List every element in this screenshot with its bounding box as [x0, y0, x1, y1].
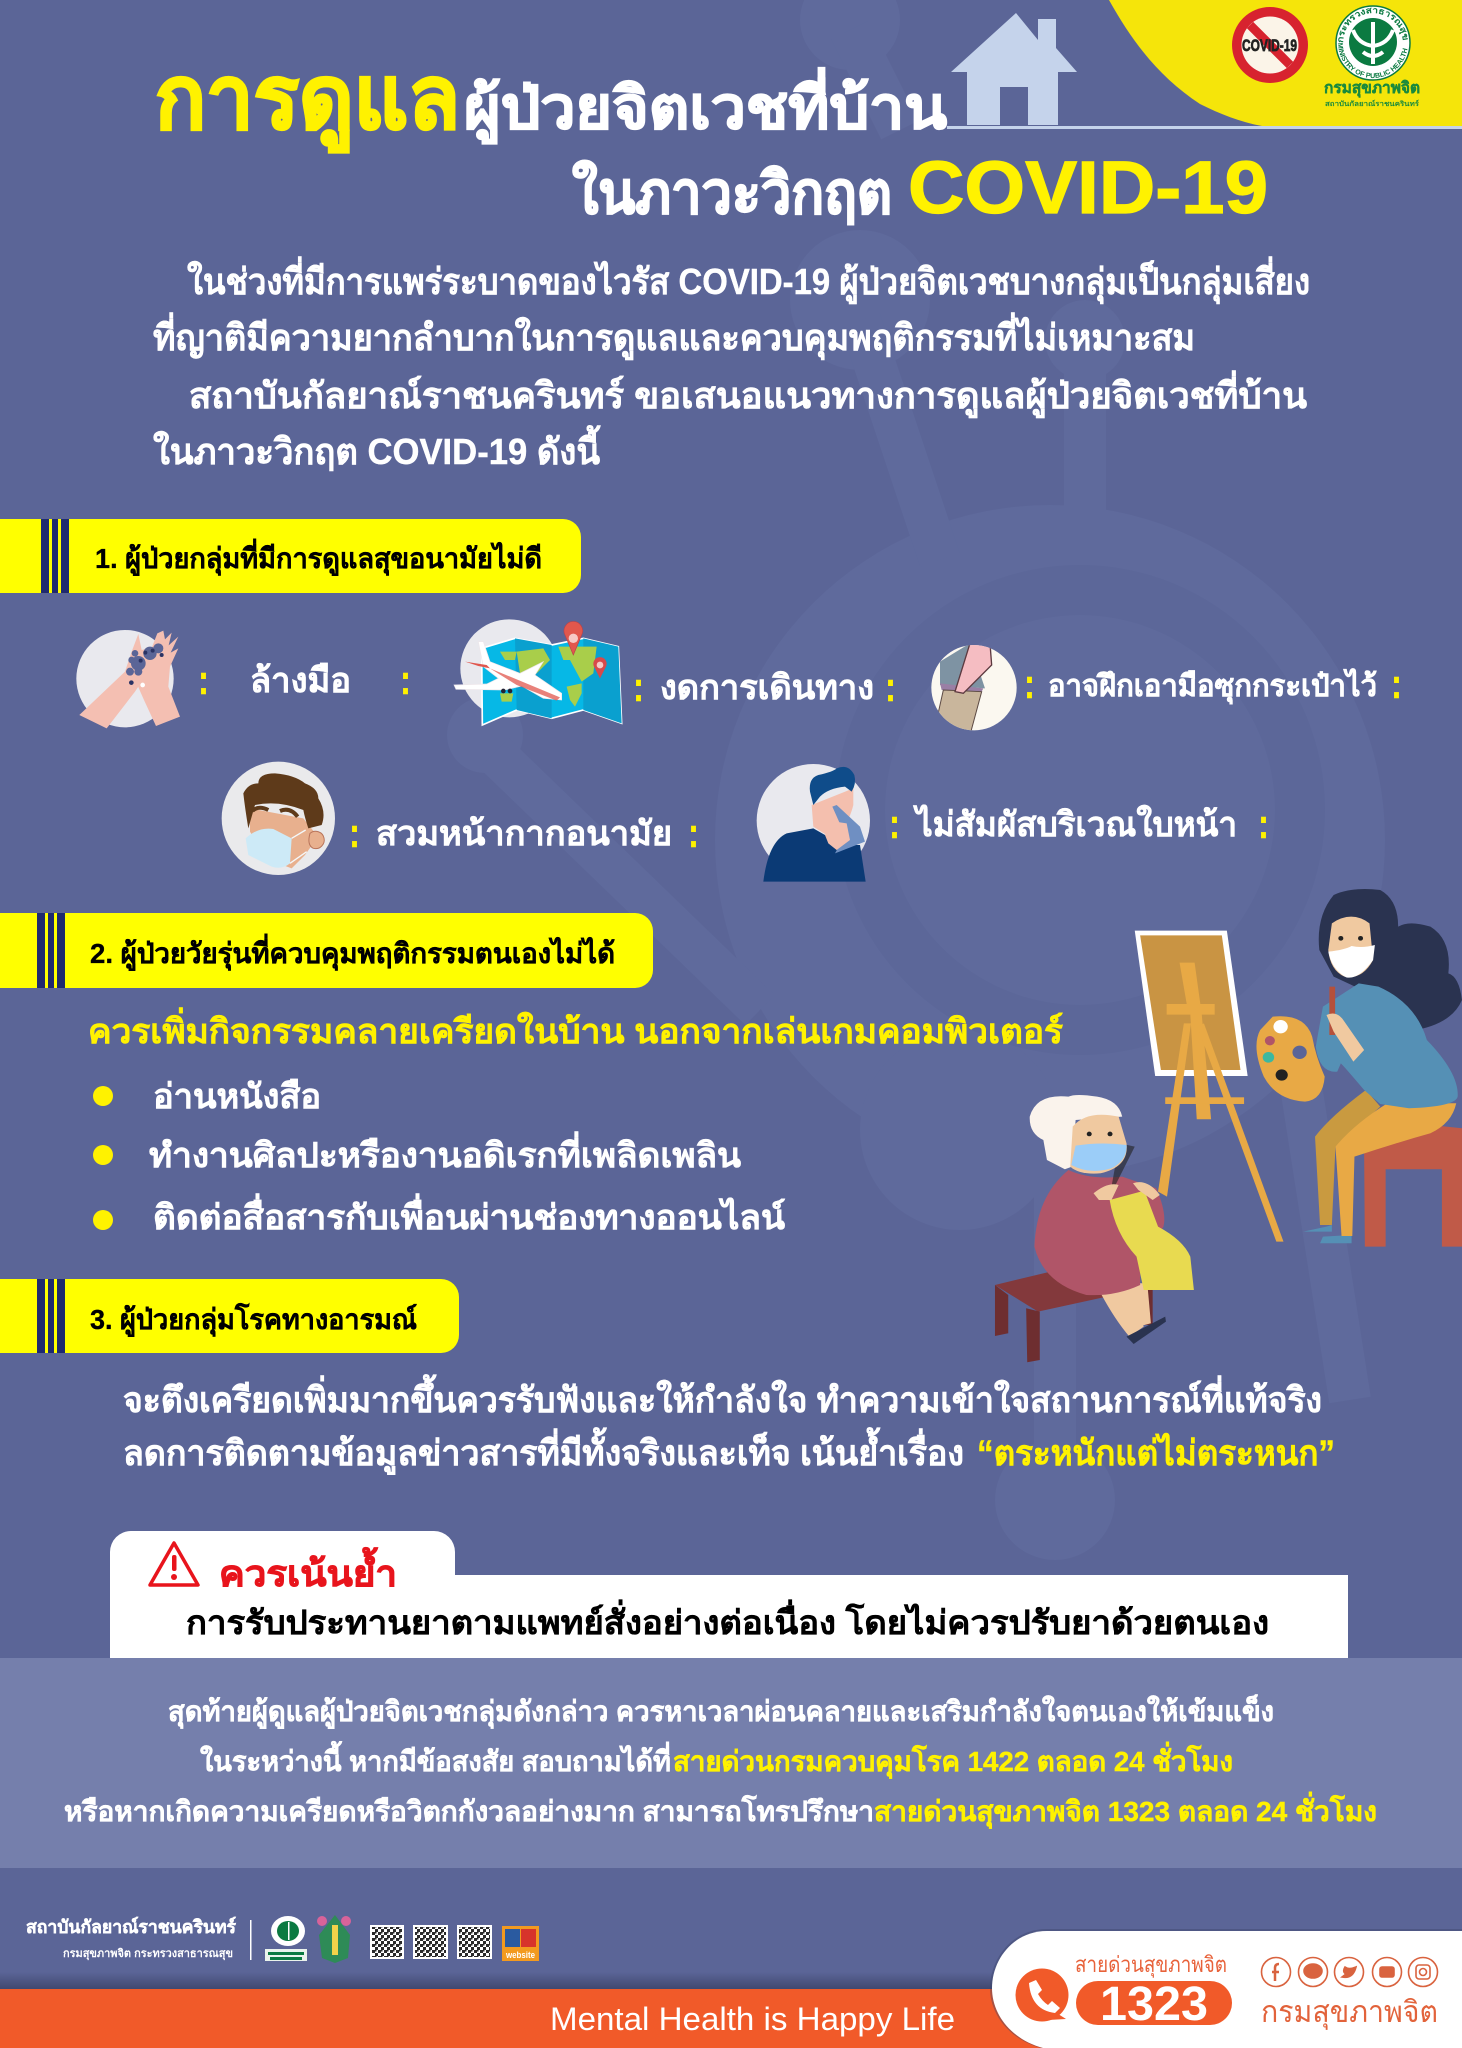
closing band: สุดท้ายผู้ดูแลผู้ป่วยจิตเวชกลุ่มดังกล่าว ควรหาเวลาผ่อนคลายและเสริมกำลังใจตนเองให้เข้มแข็ง: [168, 1694, 1274, 1729]
item: wash hands: [76, 630, 411, 728]
icon: institute emblem: [317, 1915, 351, 1963]
item: wear mask: สวมหน้ากากอนามัย: [376, 815, 672, 853]
corner badge: [1109, 0, 1462, 126]
icon: man with mask: [222, 762, 335, 875]
section 2 activity list: ติดต่อสื่อสารกับเพื่อนผ่านช่องทางออนไลน์: [153, 1193, 785, 1237]
closing band: สายด่วนสุขภาพจิต 1323 ตลอด 24 ชั่วโมง: [874, 1791, 1377, 1829]
item: hands in pockets: :: [1391, 660, 1402, 707]
section 2 activity list: อ่านหนังสือ: [153, 1078, 321, 1116]
closing band: ในระหว่างนี้ หากมีข้อสงสัย สอบถามได้ที่: [200, 1740, 671, 1777]
item: wear mask: :: [688, 809, 699, 856]
callout: emphasis: [110, 1531, 1348, 1658]
hotline number: 1323: [1100, 1978, 1208, 2031]
footer orange band: [0, 1972, 1462, 2048]
item: no travel: :: [885, 663, 896, 710]
icon: house: [947, 13, 1462, 129]
item: hands in pockets: :: [1024, 660, 1035, 707]
grandmother: [1030, 1095, 1194, 1344]
section 1 header: 1. ผู้ป่วยกลุ่มที่มีการดูแลสุขอนามัยไม่ดี: [95, 538, 542, 576]
section 2 subheading: ควรเพิ่มกิจกรรมคลายเครียดในบ้าน นอกจากเล่นเกมคอมพิวเตอร์: [88, 1007, 1064, 1051]
QR codes: [370, 1925, 492, 1959]
section 3 text: จะตึงเครียดเพิ่มมากขึ้นควรรับฟังและให้กำลังใจ ทำความเข้าใจสถานการณ์ที่แท้จริง: [123, 1374, 1322, 1420]
easel and canvas: [1135, 931, 1283, 1242]
section 1 header: [0, 519, 581, 593]
icon: no covid sign: [1232, 7, 1308, 83]
item: no travel: :: [633, 663, 644, 710]
title: COVID-19: [908, 146, 1268, 229]
footer left logos: [26, 1915, 539, 1963]
item: wash hands: ล้างมือ: [250, 662, 351, 700]
item: don't touch face: :: [889, 800, 900, 847]
icon: ministry emblem: กระทรวงสาธารณสุข: [1338, 8, 1408, 42]
hotline panel: [990, 1929, 1462, 2048]
icon: ministry logo: [265, 1916, 307, 1961]
icon: social website: website: [505, 1950, 535, 1960]
bench: [995, 1272, 1153, 1362]
hotline number: [1076, 1978, 1232, 2031]
painter: [1256, 889, 1462, 1243]
icon: social website: [502, 1926, 539, 1961]
icon: warning triangle: [150, 1543, 198, 1585]
item: don't touch face: [757, 764, 1269, 882]
intro paragraph: ในภาวะวิกฤต COVID-19 ดังนี้: [153, 425, 601, 472]
illustration: painter and knitting grandmother: [995, 889, 1462, 1362]
footer orange band: Mental Health is Happy Life: [550, 2001, 955, 2037]
icon: ministry emblem: MINISTRY OF PUBLIC HEALTH: [1338, 43, 1408, 78]
icon: hand in pocket: [931, 643, 1017, 735]
closing band: หรือหากเกิดความเครียดหรือวิตกกังวลอย่างมาก สามารถโทรปรึกษา: [64, 1794, 874, 1827]
section 2 activity list: [93, 1078, 785, 1237]
section 3 header: 3. ผู้ป่วยกลุ่มโรคทางอารมณ์: [90, 1302, 417, 1337]
item: wash hands: :: [400, 656, 411, 703]
icon: no covid sign: COVID-19: [1242, 36, 1297, 55]
icon: ministry emblem: [1335, 5, 1411, 81]
callout: emphasis: การรับประทานยาตามแพทย์สั่งอย่างต่อเนื่อง โดยไม่ควรปรับยาด้วยตนเอง: [186, 1599, 1269, 1641]
institute name: สถาบันกัลยาณ์ราชนครินทร์: [1325, 99, 1419, 108]
social icons: [1262, 1958, 1438, 1986]
footer left logos: สถาบันกัลยาณ์ราชนครินทร์: [26, 1916, 236, 1937]
item: wash hands: :: [198, 656, 209, 703]
section 3 text: ลดการติดตามข้อมูลข่าวสารที่มีทั้งจริงและเท็จ เน้นย้ำเรื่อง: [123, 1427, 964, 1475]
intro paragraph: สถาบันกัลยาณ์ราชนครินทร์ ขอเสนอแนวทางการดูแลผู้ป่วยจิตเวชที่บ้าน: [189, 370, 1307, 419]
item: don't touch face: ไม่สัมผัสบริเวณใบหน้า: [913, 804, 1237, 844]
item: wear mask: [222, 762, 699, 875]
icon: washing hands: [76, 630, 180, 728]
intro paragraph: ในช่วงที่มีการแพร่ระบาดของไวรัส COVID-19 ผู้ป่วยจิตเวชบางกลุ่มเป็นกลุ่มเสี่ยง: [187, 256, 1310, 305]
intro paragraph: ที่ญาติมีความยากลำบากในการดูแลและควบคุมพฤติกรรมที่ไม่เหมาะสม: [153, 312, 1195, 361]
section 2 header: 2. ผู้ป่วยวัยรุ่นที่ควบคุมพฤติกรรมตนเองไม่ได้: [90, 933, 615, 971]
section 3 text: [123, 1374, 1335, 1475]
closing band: [0, 1658, 1462, 1868]
section 3 text: “ตระหนักแต่ไม่ตระหนก”: [977, 1432, 1335, 1473]
hotline panel: กรมสุขภาพจิต: [1261, 1996, 1438, 2031]
hotline panel: สายด่วนสุขภาพจิต: [1075, 1952, 1227, 1978]
callout: emphasis: ควรเน้นย้ำ: [219, 1547, 397, 1594]
icon: phone: [1016, 1968, 1068, 2022]
item: hands in pockets: [931, 643, 1402, 735]
title: การดูแล: [155, 48, 460, 153]
item: no travel: [454, 619, 896, 725]
title: ในภาวะวิกฤต: [572, 159, 892, 226]
title: [155, 48, 1268, 229]
closing band: สายด่วนกรมควบคุมโรค 1422 ตลอด 24 ชั่วโมง: [673, 1741, 1233, 1779]
icon: man touching face: [757, 764, 870, 882]
section 2 activity list: ทำงานศิลปะหรืองานอดิเรกที่เพลิดเพลิน: [149, 1131, 741, 1175]
stool: [1364, 1125, 1462, 1247]
item: don't touch face: :: [1258, 800, 1269, 847]
intro paragraph: [153, 256, 1310, 472]
item: wear mask: :: [349, 809, 360, 856]
yellow corner: [1109, 0, 1462, 126]
footer left logos: กรมสุขภาพจิต กระทรวงสาธารณสุข: [63, 1947, 233, 1961]
item: hands in pockets: อาจฝึกเอามือซุกกระเป๋าไว้: [1048, 668, 1377, 705]
title: ผู้ป่วยจิตเวชที่บ้าน: [464, 67, 947, 144]
icon: map and plane: [454, 619, 622, 725]
item: no travel: งดการเดินทาง: [660, 669, 874, 707]
section 3 header: [0, 1279, 459, 1353]
department name: กรมสุขภาพจิต: [1324, 79, 1420, 98]
section 2 header: [0, 913, 653, 988]
